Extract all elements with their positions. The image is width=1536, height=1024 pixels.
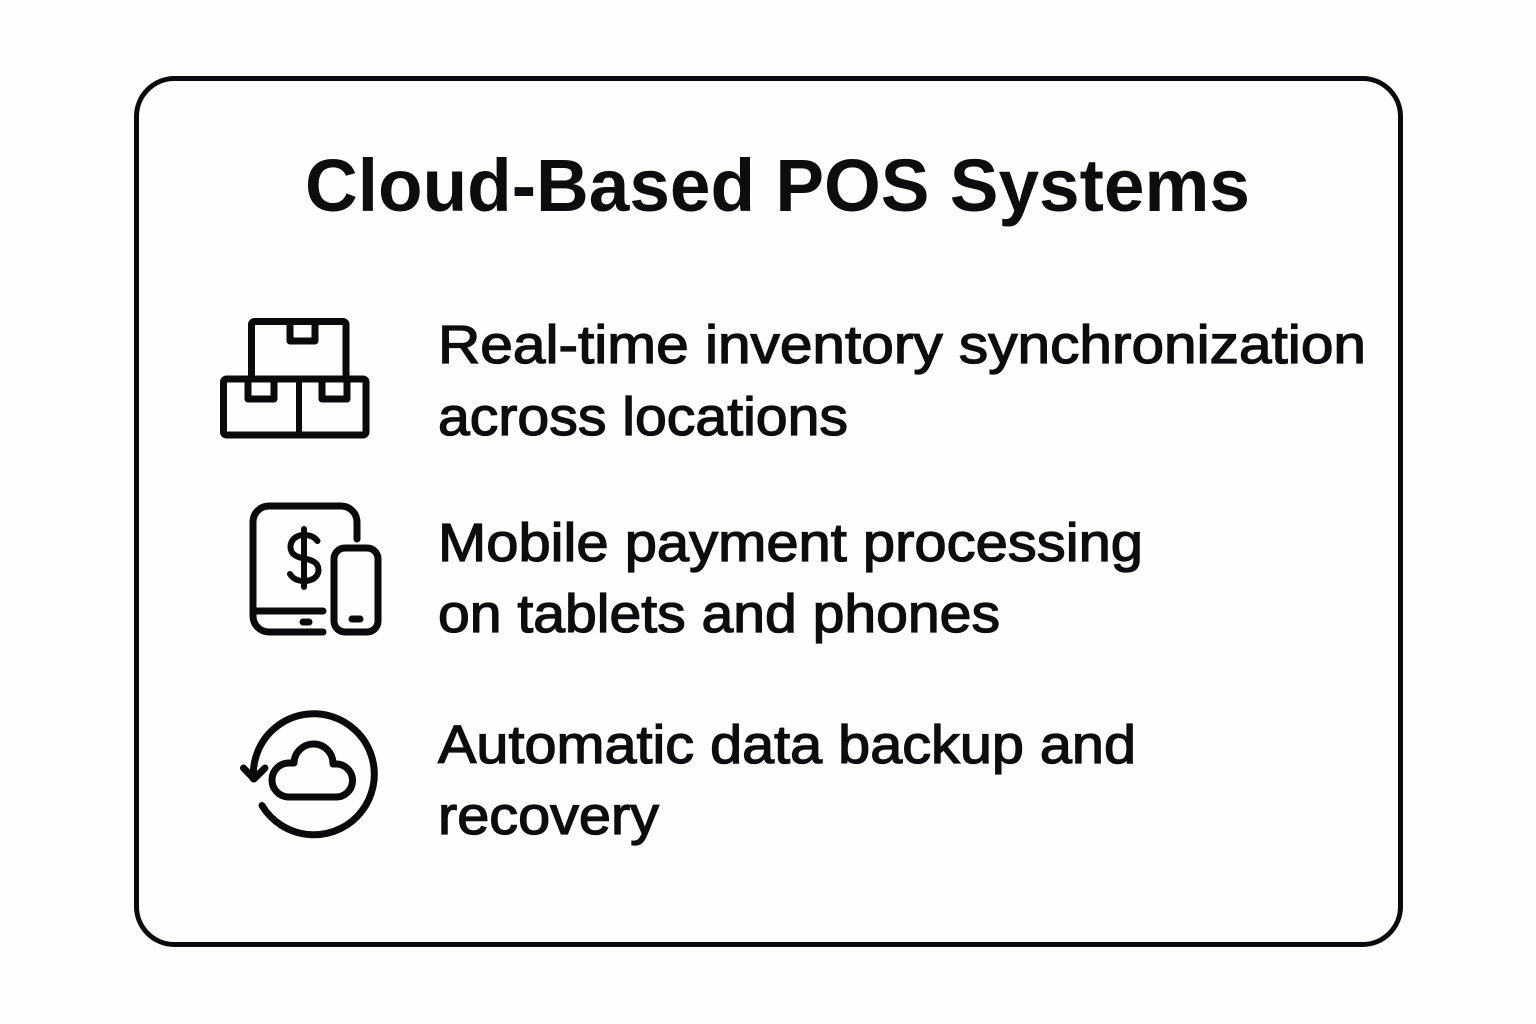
text: backup feature — [438, 715, 1136, 846]
text: backup feature: recovery — [438, 786, 659, 846]
text: inventory feature — [438, 315, 1366, 447]
icon: cloud backup cycle — [244, 714, 374, 835]
icon: stacked boxes — [224, 322, 366, 435]
icon: tablet and phone with dollar sign — [253, 506, 378, 632]
text: inventory feature: across locations — [438, 387, 848, 447]
text: inventory feature: Real-time inventory synchronization — [438, 315, 1366, 375]
title: Cloud-Based POS Systems — [305, 144, 1250, 227]
text: mobile payment feature: on tablets and phones — [438, 584, 1000, 644]
panel: card — [136, 78, 1400, 944]
text: mobile payment feature — [438, 513, 1143, 644]
text: mobile payment feature: Mobile payment processing — [438, 513, 1143, 573]
text: backup feature: Automatic data backup and — [438, 715, 1136, 775]
